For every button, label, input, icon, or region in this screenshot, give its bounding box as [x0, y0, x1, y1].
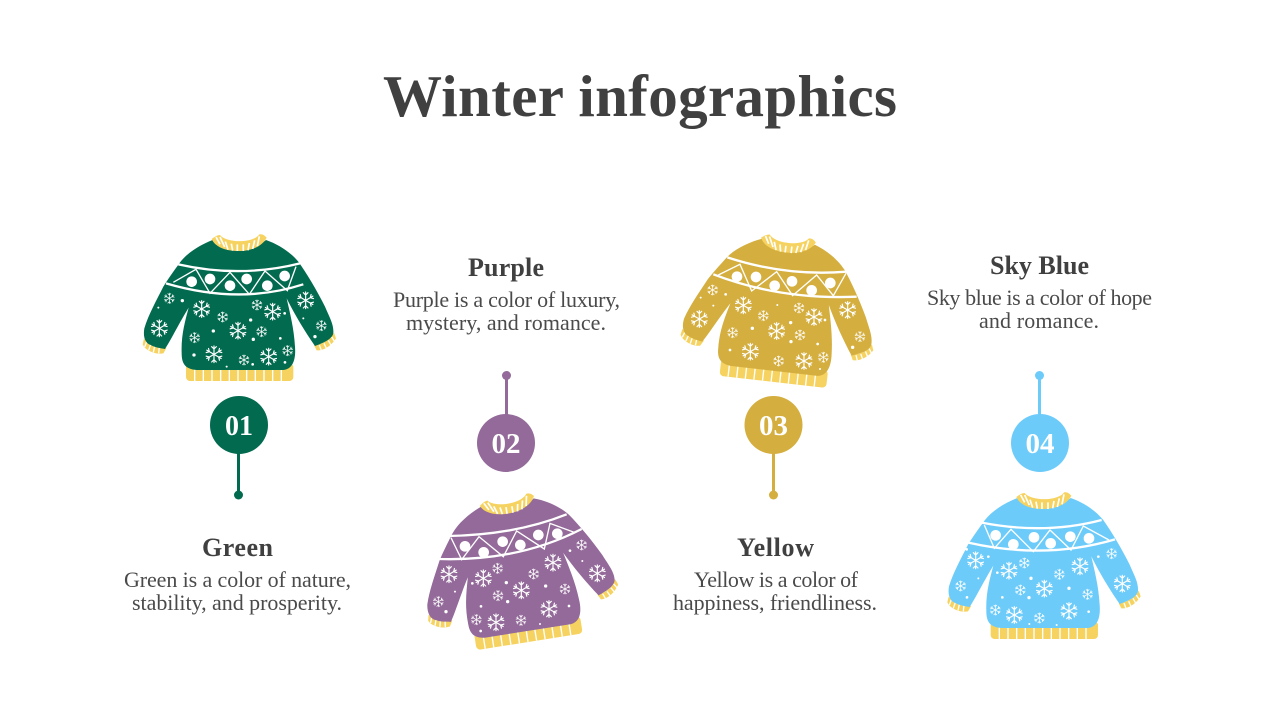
panel: purple	[393, 253, 625, 657]
text: purple description: Purple is a color of luxury,	[393, 287, 620, 312]
title: Winter infographics	[383, 63, 897, 129]
panel: yellow	[673, 225, 885, 615]
text: sky blue description	[927, 285, 1152, 333]
panel: sky blue	[927, 251, 1152, 639]
text: yellow description	[673, 567, 877, 615]
text: purple description: mystery, and romance.	[406, 310, 606, 335]
text: green description: stability, and prosperity.	[132, 590, 342, 615]
heading: green: Green	[202, 533, 274, 562]
number badge 04	[1011, 371, 1069, 472]
text: green description: Green is a color of nature,	[124, 567, 351, 592]
heading: purple: Purple	[468, 253, 544, 282]
number badge 04: 04	[1026, 428, 1054, 460]
text: green description	[124, 567, 351, 615]
heading: yellow: Yellow	[737, 533, 814, 562]
number badge 02	[477, 371, 535, 472]
icon: yellow sweater	[676, 225, 885, 393]
number badge 01: 01	[225, 410, 253, 442]
panel: green	[124, 234, 351, 615]
text: yellow description: Yellow is a color of	[694, 567, 859, 592]
heading: sky blue: Sky Blue	[990, 251, 1089, 280]
number badge 01	[210, 396, 268, 500]
icon: sky blue sweater	[947, 492, 1141, 639]
number badge 03	[744, 396, 802, 500]
icon: purple sweater	[411, 482, 625, 657]
text: purple description	[393, 287, 620, 335]
number badge 03: 03	[759, 410, 788, 442]
text: yellow description: happiness, friendliness.	[673, 590, 877, 615]
text: sky blue description: Sky blue is a color of hope	[927, 285, 1152, 310]
icon: green sweater	[143, 234, 336, 381]
number badge 02: 02	[492, 428, 520, 460]
text: sky blue description: and romance.	[979, 308, 1099, 333]
